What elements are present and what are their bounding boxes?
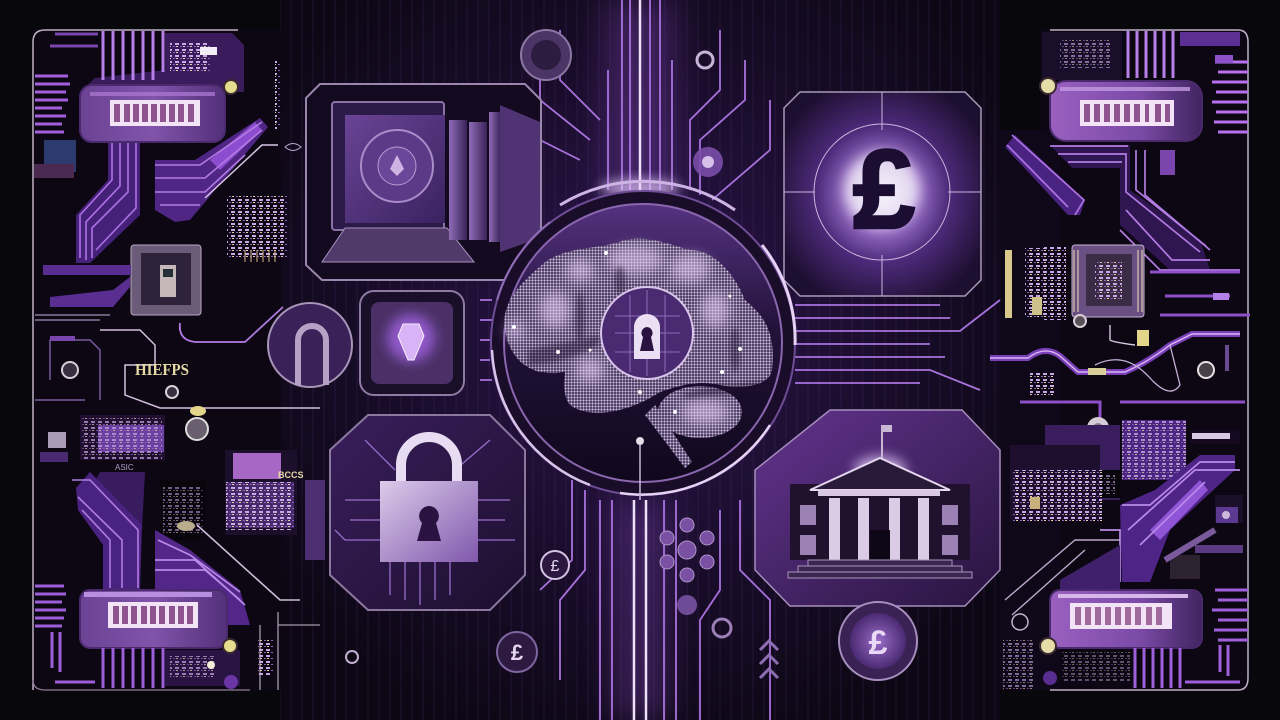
diagonal trace bundle lower left [76, 142, 140, 263]
chip top [80, 85, 225, 142]
top body [80, 33, 244, 92]
panel: bank [755, 410, 1000, 606]
panel: large padlock [330, 415, 525, 610]
icon: monitor [332, 102, 445, 230]
diagonal bundle top left [1005, 135, 1085, 215]
icon: eye [285, 144, 301, 150]
icon: keyhole [417, 506, 441, 541]
capacitor top [224, 80, 238, 94]
icon: lower nodes [346, 595, 731, 663]
panel: brain circle [491, 181, 795, 500]
chip text: HIEFPS [135, 360, 189, 379]
icon: brain [504, 239, 773, 468]
black chip cluster [160, 480, 206, 540]
chip top [1050, 81, 1202, 141]
icon: chevrons [760, 641, 778, 678]
icon: large pound coin [839, 602, 917, 680]
icon: brain keyhole lens [601, 287, 693, 379]
data dots block [227, 195, 287, 257]
lower side details [1195, 545, 1243, 553]
panel: left circuit board [33, 30, 325, 690]
diagonal bundle bottom [1120, 455, 1235, 582]
purple text blocks [225, 450, 325, 560]
icon: large pound coin: £ [869, 624, 888, 662]
panel: laptop and binders [306, 84, 541, 280]
panel: right circuit board [990, 30, 1250, 690]
small chip [131, 245, 201, 315]
icon: hex molecule [660, 518, 714, 582]
stripes bottom [165, 650, 240, 686]
lower row [1020, 402, 1245, 425]
icon: pound node [541, 551, 569, 579]
icon: pound node: £ [551, 558, 560, 575]
central vertical circuit traces [480, 0, 1000, 720]
capacitor top [1040, 78, 1056, 94]
chip bottom [1050, 590, 1202, 648]
icon: bulb [398, 324, 424, 360]
component row [35, 340, 100, 400]
icon: bank building [788, 425, 972, 578]
mid purple block [1010, 420, 1240, 522]
icon: lock shackle [401, 437, 457, 482]
panel: small lock bulb [360, 291, 464, 395]
icon: small pound coin: £ [511, 640, 524, 665]
circuit text block: ASIC [115, 463, 134, 472]
icon: binders [449, 105, 540, 252]
icon: padlock ring [268, 303, 352, 387]
small chip [1072, 245, 1144, 317]
chip bottom [80, 590, 227, 648]
central light flare [600, 179, 680, 197]
center board background [280, 0, 1000, 720]
right bands [1150, 272, 1250, 315]
icon: top node [693, 52, 723, 177]
lower right trace bundle [155, 530, 250, 625]
node under brain [639, 440, 641, 500]
diagonal trace bundle right [155, 118, 268, 222]
icon: pound sign: £ [853, 127, 915, 252]
icon: top coin [521, 30, 571, 80]
icon: laptop base [322, 228, 474, 262]
S band [990, 334, 1240, 391]
panel: pound [784, 92, 981, 296]
bands [43, 265, 131, 275]
top body [1042, 32, 1122, 80]
circuit text block [40, 415, 165, 472]
icon: small pound coin [497, 632, 537, 672]
stripes bottom [1062, 652, 1130, 682]
lower left trace bundle [90, 472, 145, 530]
gold bars [1005, 245, 1066, 320]
purple text blocks: BCCS [278, 470, 304, 480]
icon: lock body [380, 481, 478, 562]
side stripes [35, 76, 70, 132]
